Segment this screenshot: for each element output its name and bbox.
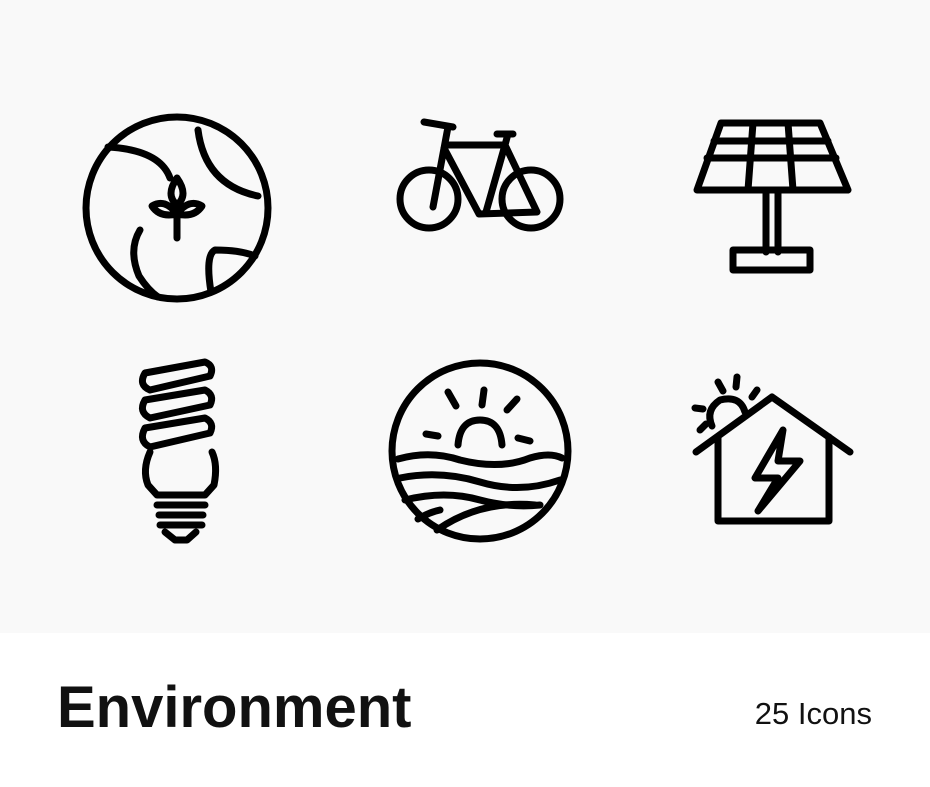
title: Environment (57, 675, 412, 740)
icon: solar panel (697, 123, 848, 270)
icon: globe with plant (86, 117, 268, 299)
icon count: 25 Icons (755, 696, 872, 731)
icon: sunrise landscape (392, 363, 568, 539)
icon: solar house with lightning (695, 377, 850, 521)
icon: energy saving bulb (142, 362, 216, 540)
icon: bicycle (400, 122, 560, 228)
